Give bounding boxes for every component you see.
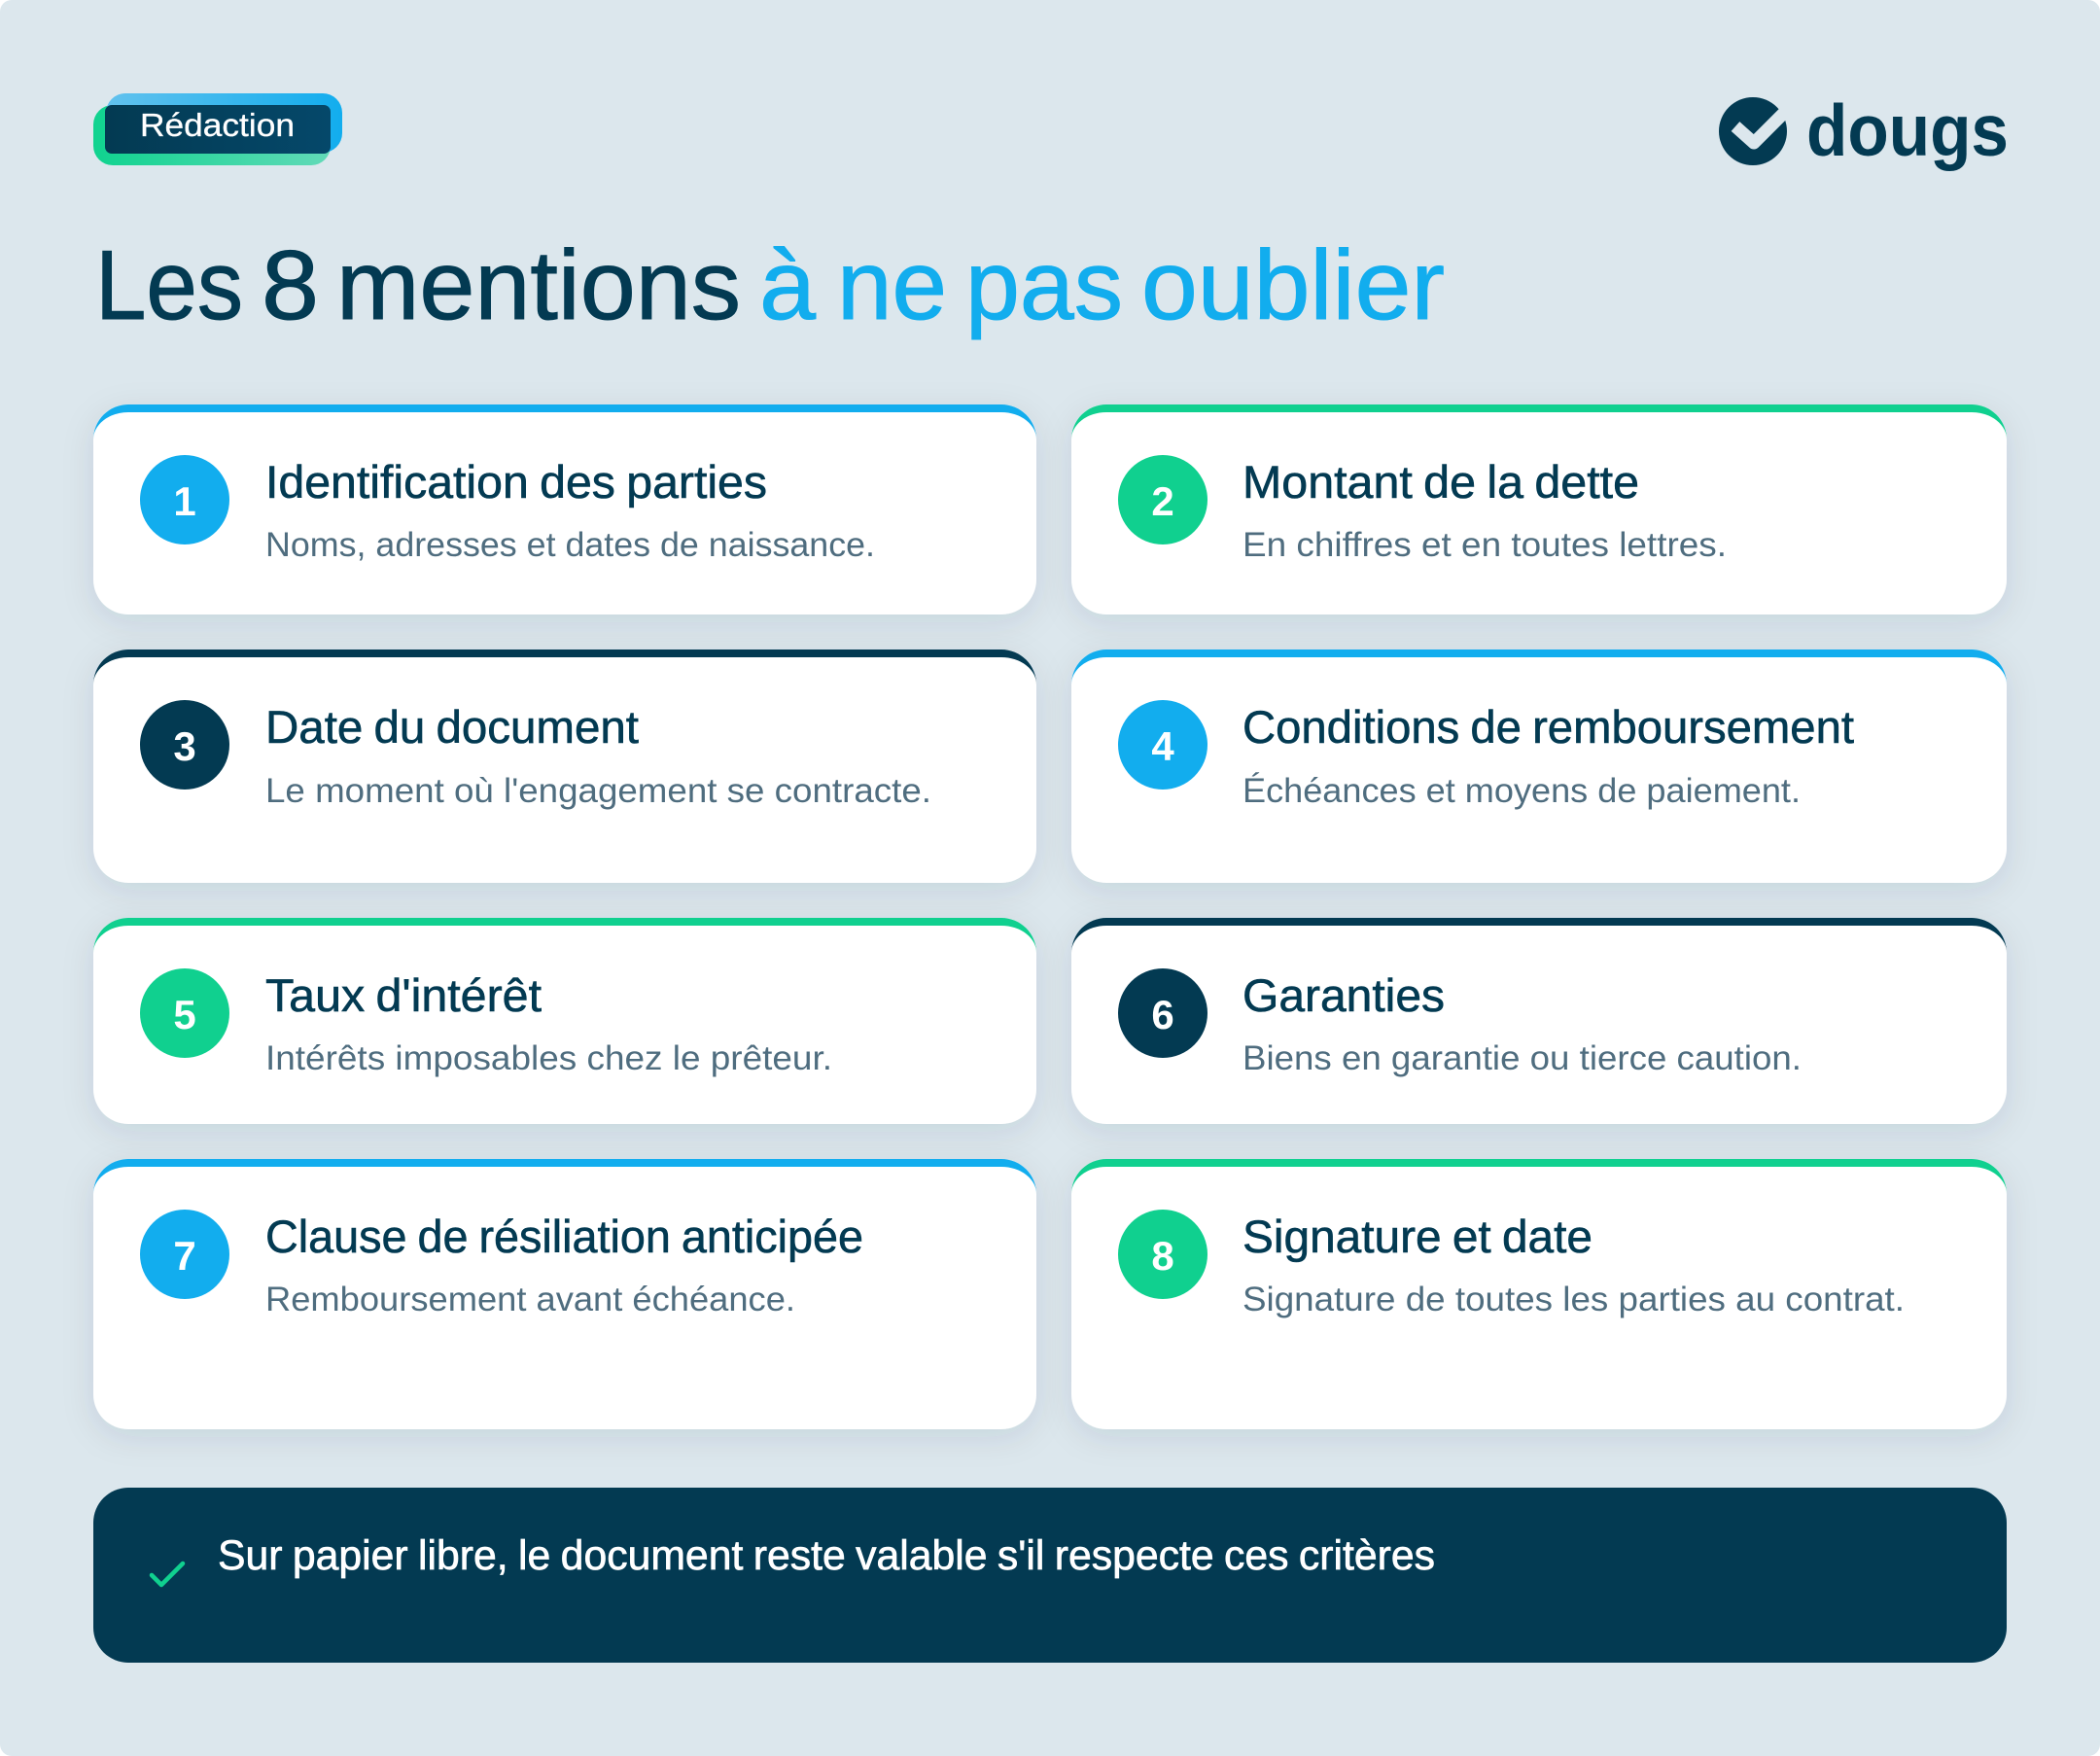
badge: Rédaction	[93, 93, 342, 165]
card 3: Date du document: 3	[173, 723, 196, 769]
card 6: Garanties	[1071, 918, 2007, 1124]
logo: dougs	[1719, 89, 2009, 171]
card 6: Garanties: 6	[1151, 992, 1174, 1037]
card 5: Taux d'intérêt: Taux d'intérêt	[265, 969, 542, 1021]
card 6: Garanties: Garanties	[1242, 969, 1445, 1021]
card 3: Date du document: Le moment où l'engagement se contracte.	[265, 771, 931, 810]
logo wordmark: dougs	[1806, 89, 2009, 171]
title: 8	[262, 231, 319, 340]
card 8: Signature et date	[1071, 1159, 2007, 1429]
icon: check circle	[1719, 97, 1794, 165]
title: Les	[95, 231, 243, 340]
title: à	[759, 231, 817, 340]
title: pas	[965, 231, 1123, 340]
card 7: Clause de résiliation anticipée: Remboursement avant échéance.	[265, 1280, 795, 1318]
card 8: Signature et date: 8	[1151, 1233, 1174, 1279]
card 4: Conditions de remboursement: Conditions de remboursement	[1242, 701, 1854, 753]
card 1: Identification des parties: Noms, adresses et dates de naissance.	[265, 525, 875, 564]
badge: Rédaction: Rédaction	[140, 107, 295, 143]
card 5: Taux d'intérêt: Intérêts imposables chez le prêteur.	[265, 1038, 832, 1077]
card 5: Taux d'intérêt	[93, 918, 1036, 1124]
icon: check mark	[152, 1563, 183, 1585]
card 3: Date du document: Date du document	[265, 701, 639, 753]
card 4: Conditions de remboursement: Échéances et moyens de paiement.	[1242, 771, 1801, 810]
title: mentions	[336, 231, 741, 340]
card 1: Identification des parties: Identification des parties	[265, 456, 767, 508]
card 8: Signature et date: Signature et date	[1242, 1211, 1592, 1262]
card 4: Conditions de remboursement: 4	[1151, 723, 1174, 769]
title: oublier	[1141, 231, 1445, 340]
title: ne	[837, 231, 947, 340]
card 8: Signature et date: Signature de toutes les parties au contrat.	[1242, 1280, 1905, 1318]
title	[95, 231, 1445, 340]
callout banner	[93, 1488, 2007, 1663]
callout text: Sur papier libre, le document reste valable s'il respecte ces critères	[218, 1532, 1435, 1579]
card 3: Date du document	[93, 650, 1036, 883]
card 1: Identification des parties	[93, 404, 1036, 615]
card 2: Montant de la dette: En chiffres et en toutes lettres.	[1242, 525, 1727, 564]
card 2: Montant de la dette: 2	[1151, 478, 1174, 524]
card 7: Clause de résiliation anticipée	[93, 1159, 1036, 1429]
card 6: Garanties: Biens en garantie ou tierce caution.	[1242, 1038, 1802, 1077]
card 5: Taux d'intérêt: 5	[173, 992, 196, 1037]
card 2: Montant de la dette: Montant de la dette	[1242, 456, 1639, 508]
card 4: Conditions de remboursement	[1071, 650, 2007, 883]
card 2: Montant de la dette	[1071, 404, 2007, 615]
card 1: Identification des parties: 1	[173, 478, 196, 524]
card 7: Clause de résiliation anticipée: 7	[173, 1233, 196, 1279]
card 7: Clause de résiliation anticipée: Clause de résiliation anticipée	[265, 1211, 863, 1262]
